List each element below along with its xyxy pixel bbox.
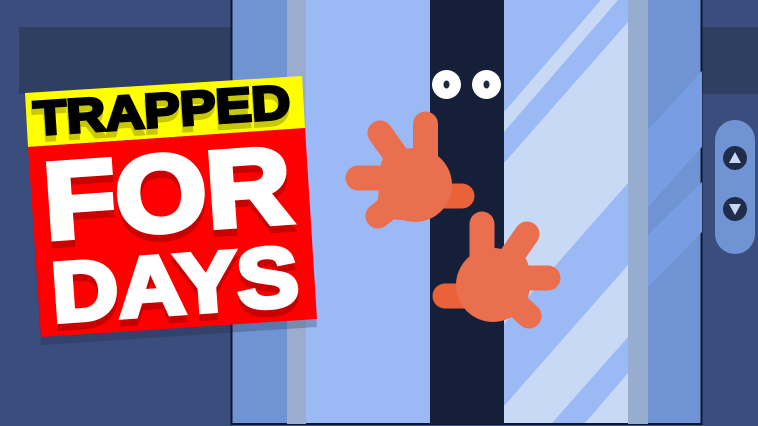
right door side strip [628, 0, 648, 424]
frame reflections [648, 71, 702, 287]
heading: FOR: FOR [40, 131, 295, 269]
dark gap between doors [430, 0, 504, 424]
right door with glass reflections [504, 0, 628, 423]
heading: TRAPPED: TRAPPED [32, 76, 292, 146]
dark wall band left [19, 27, 232, 94]
left door [306, 0, 430, 423]
sign shadow [25, 84, 317, 345]
lower hand [445, 224, 548, 322]
sign yellow banner [25, 76, 305, 147]
upper hand [358, 124, 462, 222]
heading: TRAPPED: TRAPPED [31, 82, 291, 152]
eyes peering from the gap [432, 70, 501, 99]
heading: DAYS: DAYS [48, 229, 301, 340]
left door side strip [287, 0, 306, 424]
dark wall band right [702, 27, 758, 94]
heading: FOR: FOR [40, 124, 295, 262]
heading: DAYS: DAYS [49, 236, 302, 347]
sign red panel [28, 128, 317, 337]
elevator frame [232, 0, 702, 424]
call button panel [715, 120, 755, 254]
